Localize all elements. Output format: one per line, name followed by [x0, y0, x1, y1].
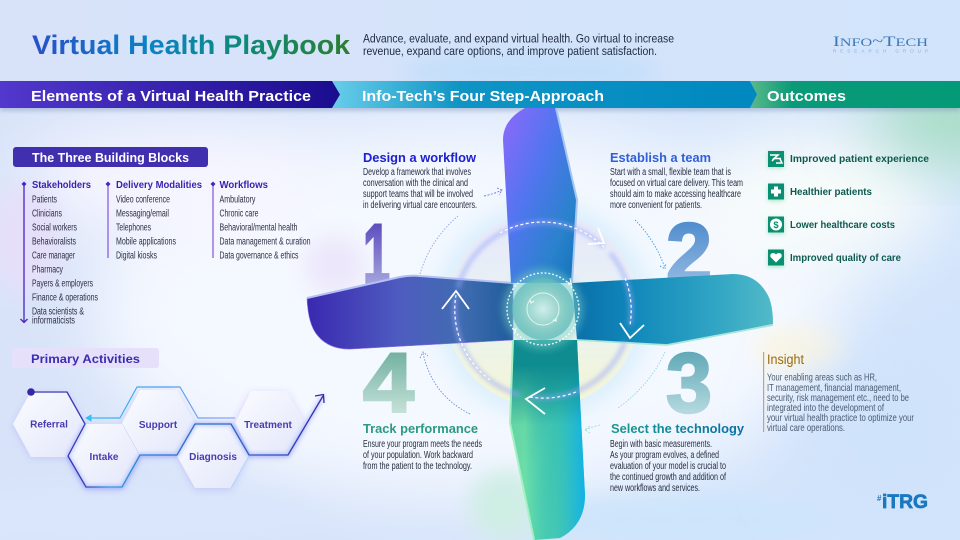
step 3: select the technology [610, 422, 744, 494]
hexagon: intake: Intake [90, 452, 119, 463]
section banners [0, 81, 960, 111]
hexagon: diagnosis [177, 424, 249, 488]
step number 3: 3 [666, 336, 712, 430]
hexagon: diagnosis: Diagnosis [189, 452, 237, 463]
blade: establish (top) [503, 108, 577, 283]
step 3: select the technology: Begin with basic measurements. [610, 439, 712, 450]
hexagon: intake [68, 424, 140, 487]
step 2: establish a team: should aim to make accessing healthcare [610, 189, 741, 200]
tagline: Advance, evaluate, and expand virtual health. Go virtual to increase [363, 32, 674, 46]
heading: primary activities [12, 348, 159, 368]
step number 2: 2 [666, 206, 712, 300]
column: delivery modalities: Digital kiosks [116, 250, 157, 262]
panel: three building blocks [13, 147, 310, 326]
step 2: establish a team: focused on virtual care delivery. This team [610, 178, 743, 189]
outcome: improved patient experience [768, 151, 929, 168]
blade: team (right) [572, 274, 773, 345]
hexagon shadows [13, 392, 305, 490]
arrow: primary activity flow [27, 387, 324, 487]
column: workflows [210, 180, 310, 262]
step 3: select the technology: new workflows and services. [610, 483, 700, 494]
step 2: establish a team: Start with a small, flexible team that is [610, 167, 731, 178]
column: delivery modalities: Telephones [116, 222, 151, 234]
column: stakeholders: informaticists [32, 316, 75, 326]
panel: insight [763, 352, 914, 434]
title: Virtual Health Playbook [32, 30, 351, 60]
step 3: select the technology: Select the technology [611, 422, 744, 436]
heading: primary activities: Primary Activities [31, 352, 140, 366]
column: workflows: Data management & curation [220, 236, 310, 248]
heading: three building blocks: The Three Building Blocks [32, 150, 189, 165]
panel: outcomes list [768, 151, 929, 267]
step 1: design a workflow: support teams that will be involved [363, 189, 473, 200]
banner: four step approach: Info-Tech’s Four Step-Approach [362, 88, 604, 105]
tagline: revenue, expand care options, and improve patient satisfaction. [363, 44, 657, 58]
column: stakeholders [20, 180, 98, 326]
outcome: lower healthcare costs: $ [773, 220, 779, 231]
white dashed flow [455, 222, 631, 398]
logo: #ITRG: # [877, 494, 882, 503]
step number 4: 4 [363, 336, 414, 430]
step 3: select the technology: As your program evolves, a defined [610, 450, 719, 461]
step 4: track performance: from the patient to the technology. [363, 461, 472, 472]
panel: primary activities [12, 348, 324, 490]
hexagon: support: Support [139, 420, 178, 431]
outcome: improved quality of care: Improved quality of care [790, 253, 901, 264]
column: stakeholders: Data scientists & [32, 306, 84, 318]
panel: insight: virtual care operations. [767, 423, 845, 434]
column: workflows: Chronic care [220, 208, 259, 220]
circular flow arc [442, 222, 644, 414]
blade: technology (bottom) [510, 340, 585, 540]
arrowheads [442, 228, 644, 414]
column: workflows: Data governance & ethics [220, 250, 299, 262]
step 1: design a workflow: conversation with the clinical and [363, 178, 468, 189]
banner: elements [0, 81, 340, 108]
panel: insight: integrated into the development of [767, 403, 884, 414]
logo: #ITRG: iTRG [882, 492, 928, 513]
column: delivery modalities: Video conference [116, 194, 170, 206]
column: stakeholders: Payers & employers [32, 278, 93, 290]
outcome: healthier patients [768, 184, 872, 201]
dashed connector arrows [420, 188, 666, 433]
banner: elements: Elements of a Virtual Health Practice [31, 88, 311, 105]
step 3: select the technology: the continued growth and addition of [610, 472, 726, 483]
blurred flow bands [455, 222, 631, 398]
column: stakeholders: Patients [32, 194, 57, 206]
step number 1: 1 [363, 207, 390, 301]
column: stakeholders: Pharmacy [32, 264, 63, 276]
column: workflows: Behavioral/mental health [220, 222, 298, 234]
hexagon: referral: Referral [30, 420, 68, 430]
panel: insight: your virtual health practice to optimize your [767, 413, 914, 424]
banner: outcomes [750, 81, 960, 108]
column: stakeholders: Stakeholders [32, 180, 91, 191]
column: stakeholders: Social workers [32, 222, 77, 234]
outcome: improved patient experience: Improved patient experience [790, 154, 929, 165]
step 4: track performance: of your population. Work backward [363, 450, 473, 461]
hexagon: treatment [235, 391, 305, 455]
chart: four step propeller [307, 108, 773, 540]
step 1: design a workflow [363, 151, 477, 211]
hexagon: referral [13, 391, 85, 457]
panel: insight: Your enabling areas such as HR, [767, 372, 877, 384]
halo ring [435, 202, 651, 418]
outcome: lower healthcare costs: Lower healthcare costs [790, 220, 895, 231]
step 3: select the technology: evaluation of your model is crucial to [610, 461, 726, 472]
step 4: track performance [363, 422, 482, 472]
column: workflows: Ambulatory [220, 194, 256, 206]
column: stakeholders: Behavioralists [32, 236, 76, 248]
blade: design (left) [307, 276, 513, 349]
column: stakeholders: Clinicians [32, 208, 62, 220]
logo: Info-Tech Research Group: INFO ~T ECH [833, 34, 928, 50]
step 2: establish a team: more convenient for patients. [610, 200, 702, 211]
step 1: design a workflow: Develop a framework that involves [363, 167, 471, 178]
hexagon: treatment: Treatment [244, 420, 293, 431]
column: stakeholders: Care manager [32, 250, 76, 262]
panel: insight: IT management, financial management, [767, 383, 901, 394]
panel: insight: Insight [767, 352, 804, 367]
banner: outcomes: Outcomes [767, 88, 846, 105]
banner: four step approach [332, 81, 757, 108]
column: delivery modalities [106, 180, 202, 262]
outcome: lower healthcare costs [768, 216, 895, 234]
outcome: improved quality of care [768, 250, 901, 267]
column: workflows: Workflows [220, 180, 268, 191]
step 2: establish a team [610, 151, 743, 211]
hexagon: support [122, 390, 195, 455]
panel: insight: security, risk management etc., need to be [767, 393, 909, 404]
outcome: healthier patients: Healthier patients [790, 187, 872, 198]
step 2: establish a team: Establish a team [610, 151, 711, 165]
step 4: track performance: Track performance [363, 422, 478, 436]
step 1: design a workflow: Design a workflow [363, 151, 476, 165]
column: delivery modalities: Mobile applications [116, 236, 176, 248]
step 1: design a workflow: in delivering virtual care encounters. [363, 200, 477, 211]
logo: Info-Tech Research Group: RESEARCH GROUP [833, 48, 928, 54]
step 4: track performance: Ensure your program meets the needs [363, 439, 482, 450]
column: delivery modalities: Messaging/email [116, 208, 169, 220]
tagline [363, 32, 674, 58]
central hub [503, 269, 583, 349]
column: stakeholders: Finance & operations [32, 292, 98, 304]
heading: three building blocks [13, 147, 208, 167]
column: delivery modalities: Delivery Modalities [116, 180, 202, 191]
